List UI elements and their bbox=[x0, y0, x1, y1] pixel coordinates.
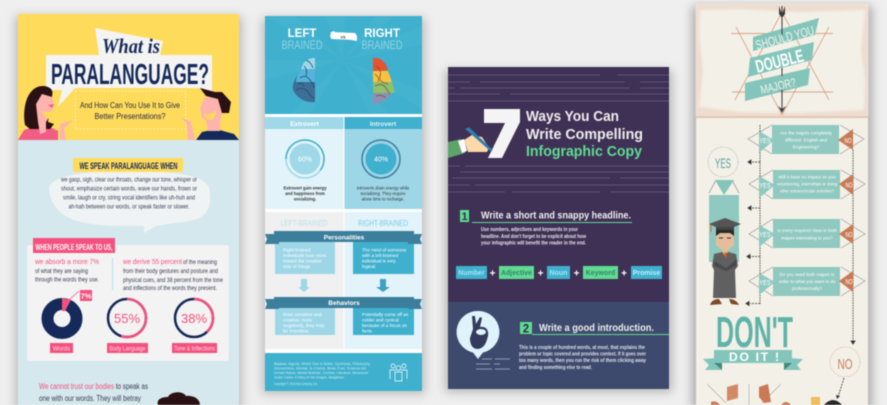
question 2: YES bbox=[760, 183, 771, 190]
heading: right brained bbox=[362, 28, 402, 52]
formula: + bbox=[621, 268, 627, 280]
icon: graduate bbox=[709, 218, 741, 305]
card: when people speak to us: we absorb a more 7% bbox=[34, 257, 99, 266]
title graphic: should you double major: DOUBLE bbox=[753, 46, 806, 77]
column: right-brained traits: individual is very bbox=[362, 258, 396, 264]
column: introvert: Introvert bbox=[370, 121, 397, 128]
card: when people speak to us bbox=[27, 238, 229, 361]
text: cannot trust our bodies bbox=[39, 382, 148, 403]
banner: personalities bbox=[265, 231, 422, 244]
formula: + bbox=[538, 268, 544, 280]
icon: left brain bbox=[293, 58, 315, 102]
column: left-brained traits: Right-brained bbox=[283, 248, 311, 252]
column: right-brained traits bbox=[344, 212, 422, 349]
heading: 7 ways: Ways You Can bbox=[526, 109, 619, 125]
chart: words donut: 7% bbox=[81, 292, 92, 300]
question 4: Do you need both majors in bbox=[779, 272, 835, 277]
column: left-brained traits: creative; more bbox=[283, 318, 313, 322]
subtitle box: And How Can You Use It to Give bbox=[80, 101, 180, 110]
dont do it: DON'T bbox=[716, 308, 793, 357]
step 2: and finding something else to read. bbox=[519, 365, 593, 371]
icon: hand with pen bbox=[448, 128, 492, 158]
question 1: YES bbox=[760, 138, 771, 145]
column: left-brained traits: toward the creative bbox=[283, 258, 322, 264]
question 1 bbox=[748, 125, 864, 154]
section: we speak paralanguage when: ah-hah between our words, or speak faster or slower. bbox=[68, 204, 190, 210]
step 1: headline. And don't forget to be explicit about how bbox=[481, 234, 586, 240]
column: introvert bbox=[344, 117, 422, 209]
column: introvert: 40% bbox=[374, 156, 388, 164]
column: right-brained traits: The mind of someone bbox=[362, 248, 407, 252]
footer: source bbox=[265, 353, 422, 391]
footer: source: Source: Algeria, Which One Is Better, Synthesis, Philosophy bbox=[274, 362, 370, 366]
column: left-brained traits: be impulsive. bbox=[283, 328, 310, 334]
title: what is paralanguage bbox=[46, 28, 212, 107]
no outcome: NO bbox=[838, 356, 852, 373]
column: extrovert: socializing. bbox=[294, 196, 316, 202]
heading: left brained: LEFT bbox=[288, 28, 316, 40]
footer: source: Judas Castel, A Diary of Her Images, Badgirlism bbox=[274, 376, 344, 380]
icon: hair at bottom bbox=[158, 392, 200, 405]
column: left-brained traits: More sensitive and bbox=[283, 312, 322, 317]
flow arrows bbox=[746, 160, 855, 344]
formula: Noun bbox=[550, 270, 567, 277]
step 1: 1 bbox=[461, 211, 468, 223]
formula: Keyword bbox=[586, 270, 615, 277]
question 1: Are the majors completely bbox=[780, 130, 833, 136]
column: extrovert bbox=[265, 117, 344, 209]
heading: 7 ways bbox=[526, 109, 643, 160]
card: when people speak to us: from their body gestures and posture and bbox=[123, 269, 218, 275]
chart: tone ring: Tone & Inflections bbox=[174, 346, 215, 352]
question 2: other extracurricular activities? bbox=[780, 188, 834, 194]
question 3 bbox=[749, 219, 865, 248]
step 2: Write a good introduction. bbox=[539, 322, 654, 334]
question 2 bbox=[749, 170, 865, 199]
panel: double major bbox=[692, 4, 872, 405]
icon: people bbox=[390, 364, 407, 381]
panel: paralanguage bbox=[15, 14, 242, 405]
card: when people speak to us: through the words they use. bbox=[35, 278, 99, 284]
column: left-brained traits: LEFT-BRAINED bbox=[280, 219, 328, 228]
formula: + bbox=[490, 268, 496, 280]
icon: man speaking bbox=[181, 88, 239, 140]
banner: behaviors bbox=[265, 297, 422, 309]
step 2: problem or topic covered and provides context. If it goes over bbox=[519, 352, 646, 358]
card: when people speak to us: of the meaning bbox=[183, 260, 217, 266]
heading: left brained: BRAINED bbox=[282, 40, 322, 52]
column: extrovert: 60% bbox=[298, 156, 312, 164]
rays bbox=[265, 16, 422, 114]
column: extrovert: Extrovert bbox=[290, 121, 320, 128]
badge: vs: VS bbox=[340, 34, 346, 40]
heading: 7 ways: Infographic Copy bbox=[526, 144, 642, 160]
arrow down bbox=[376, 279, 390, 292]
chart: words donut: Words bbox=[53, 346, 70, 352]
column: right-brained traits: because of a focus on bbox=[362, 323, 407, 328]
card: when people speak to us: WHEN PEOPLE SPEAK TO US, bbox=[36, 242, 112, 252]
question 1: NO bbox=[844, 138, 852, 145]
question 2: Will it have no impact on you bbox=[778, 174, 836, 180]
column: introvert: Introverts drain energy while bbox=[357, 186, 410, 190]
footer: source: Copyright © 2015 BizCompany, Inc. bbox=[274, 382, 318, 386]
yes outcome bbox=[708, 147, 739, 262]
subtitle box: Better Presentations? bbox=[94, 112, 166, 121]
title graphic: should you double major: MAJOR? bbox=[759, 75, 797, 97]
chart: body language ring bbox=[107, 299, 148, 353]
dont do it bbox=[703, 308, 803, 370]
formula: + bbox=[574, 268, 580, 280]
banner: behaviors: Behaviors bbox=[328, 300, 360, 307]
column: right-brained traits: Potentially come off as bbox=[362, 312, 409, 317]
formula: Number bbox=[458, 270, 485, 277]
column: left-brained traits: negatively, they may bbox=[283, 323, 325, 328]
subtitle box bbox=[76, 91, 186, 129]
question 3: majors interesting to you? bbox=[781, 236, 833, 240]
question 4: professionally? bbox=[792, 286, 822, 291]
formula bbox=[456, 266, 662, 280]
badge: vs bbox=[330, 31, 357, 41]
chart: body language ring: 55% bbox=[114, 311, 140, 326]
heading: 7 ways: Write Compelling bbox=[526, 127, 643, 143]
chart: tone ring: 38% bbox=[181, 311, 207, 326]
question 3: NO bbox=[846, 232, 853, 239]
header distress bbox=[696, 4, 868, 117]
formula: Promise bbox=[633, 270, 660, 277]
card: when people speak to us: we derive 55 percent bbox=[122, 257, 183, 266]
icon: right brain bbox=[373, 58, 395, 104]
icon: ok hand bubble bbox=[457, 311, 510, 369]
step 1: your infographic will benefit the reader in the end. bbox=[481, 240, 587, 246]
title: what is paralanguage: PARALANGUAGE? bbox=[51, 59, 209, 91]
column: left-brained traits bbox=[265, 212, 344, 349]
question 1: different: English and bbox=[785, 138, 828, 142]
no outcome bbox=[830, 347, 860, 399]
column: right-brained traits: logical. bbox=[362, 264, 376, 269]
column: introvert: alone time to recharge. bbox=[362, 196, 404, 202]
text: cannot trust our bodies: We cannot trust our bodies to speak as bbox=[39, 382, 148, 391]
formula: Adjective bbox=[501, 270, 532, 277]
column: left-brained traits: side of things. bbox=[283, 264, 311, 269]
step 2: too many words, then you run the risk of them clicking away bbox=[519, 358, 646, 364]
step 1 bbox=[460, 210, 632, 246]
column: introvert: socializing. They require bbox=[360, 191, 406, 196]
text: cannot trust our bodies: one with our words. They will betray bbox=[39, 394, 141, 403]
question 2: volunteering, internships or doing bbox=[777, 182, 837, 186]
question 4 bbox=[749, 267, 865, 296]
step 1: Use numbers, adjectives and keywords in your bbox=[481, 227, 578, 233]
heading: left brained bbox=[282, 28, 322, 52]
card: when people speak to us: of what they are saying bbox=[35, 269, 88, 275]
question 3: Is every required class in both bbox=[777, 228, 837, 233]
section: we speak paralanguage when: smile, laugh or cry, string vocal identifiers like uh-huh and bbox=[63, 196, 195, 202]
step 2: This is a couple of hundred words, at most, that explains the bbox=[519, 345, 645, 351]
card: when people speak to us: and inflections of the words they present. bbox=[123, 286, 217, 292]
panel: 7 ways infographic copy bbox=[445, 67, 672, 392]
panel: left vs right brained bbox=[262, 16, 425, 394]
dont do it: DO IT ! bbox=[729, 350, 779, 364]
title graphic: should you double major: SHOULD YOU bbox=[754, 23, 816, 53]
banner: personalities: Personalities bbox=[324, 234, 365, 242]
step 2 bbox=[519, 322, 669, 371]
icon: big 7 bbox=[484, 109, 520, 158]
bottom icons bbox=[707, 384, 842, 405]
column: right-brained traits: with a left-brained bbox=[362, 253, 399, 258]
column: right-brained traits: RIGHT-BRAINED bbox=[358, 219, 408, 228]
section: we speak paralanguage when: shout, emphasize certain words, wave our hands, frown or bbox=[61, 186, 197, 192]
footer: source: Introversion, Mental, Is Choice, Brain Fuel, Science Art bbox=[274, 366, 367, 370]
yes outcome: YES bbox=[715, 155, 731, 171]
question 3: YES bbox=[760, 232, 771, 239]
column: right-brained traits: facts. bbox=[362, 328, 373, 334]
chart: tone ring bbox=[172, 299, 217, 353]
question 4: NO bbox=[846, 279, 853, 286]
title: what is paralanguage: What is bbox=[102, 34, 160, 58]
column: left-brained traits: individuals lean more bbox=[283, 253, 327, 258]
arrow down bbox=[298, 279, 310, 292]
question 4: order to what you want to do bbox=[779, 279, 836, 284]
column: extrovert: Extrovert gain energy bbox=[283, 186, 327, 190]
icon: woman speaking bbox=[18, 86, 73, 140]
question 4: YES bbox=[760, 280, 771, 287]
step 2: 2 bbox=[523, 324, 529, 336]
column: right-brained traits: colder and cynical bbox=[362, 318, 399, 322]
chart: words donut bbox=[48, 290, 92, 353]
heading: right brained: RIGHT bbox=[364, 28, 400, 40]
card: when people speak to us: physical cues, and 38 percent from the tone bbox=[123, 278, 224, 284]
question 2: NO bbox=[846, 182, 853, 190]
title graphic: should you double major bbox=[731, 6, 833, 115]
section: we speak paralanguage when: WE SPEAK PARALANGUAGE WHEN bbox=[80, 161, 178, 171]
heading: right brained: BRAINED bbox=[362, 40, 402, 52]
section: we speak paralanguage when: we gasp, sigh, clear our throats, change our tone, whisper or bbox=[60, 178, 197, 184]
column: extrovert: and happiness from bbox=[285, 191, 325, 196]
question 1: Engineering? bbox=[793, 144, 820, 150]
step 1: Write a short and snappy headline. bbox=[481, 210, 631, 222]
section: we speak paralanguage when bbox=[49, 158, 210, 233]
footer: source: Human Nature, Mental Illustrate, Cochran, Literature, Behavioral bbox=[274, 371, 368, 375]
chart: body language ring: Body Language bbox=[110, 346, 146, 352]
flow connectors bbox=[760, 125, 853, 344]
